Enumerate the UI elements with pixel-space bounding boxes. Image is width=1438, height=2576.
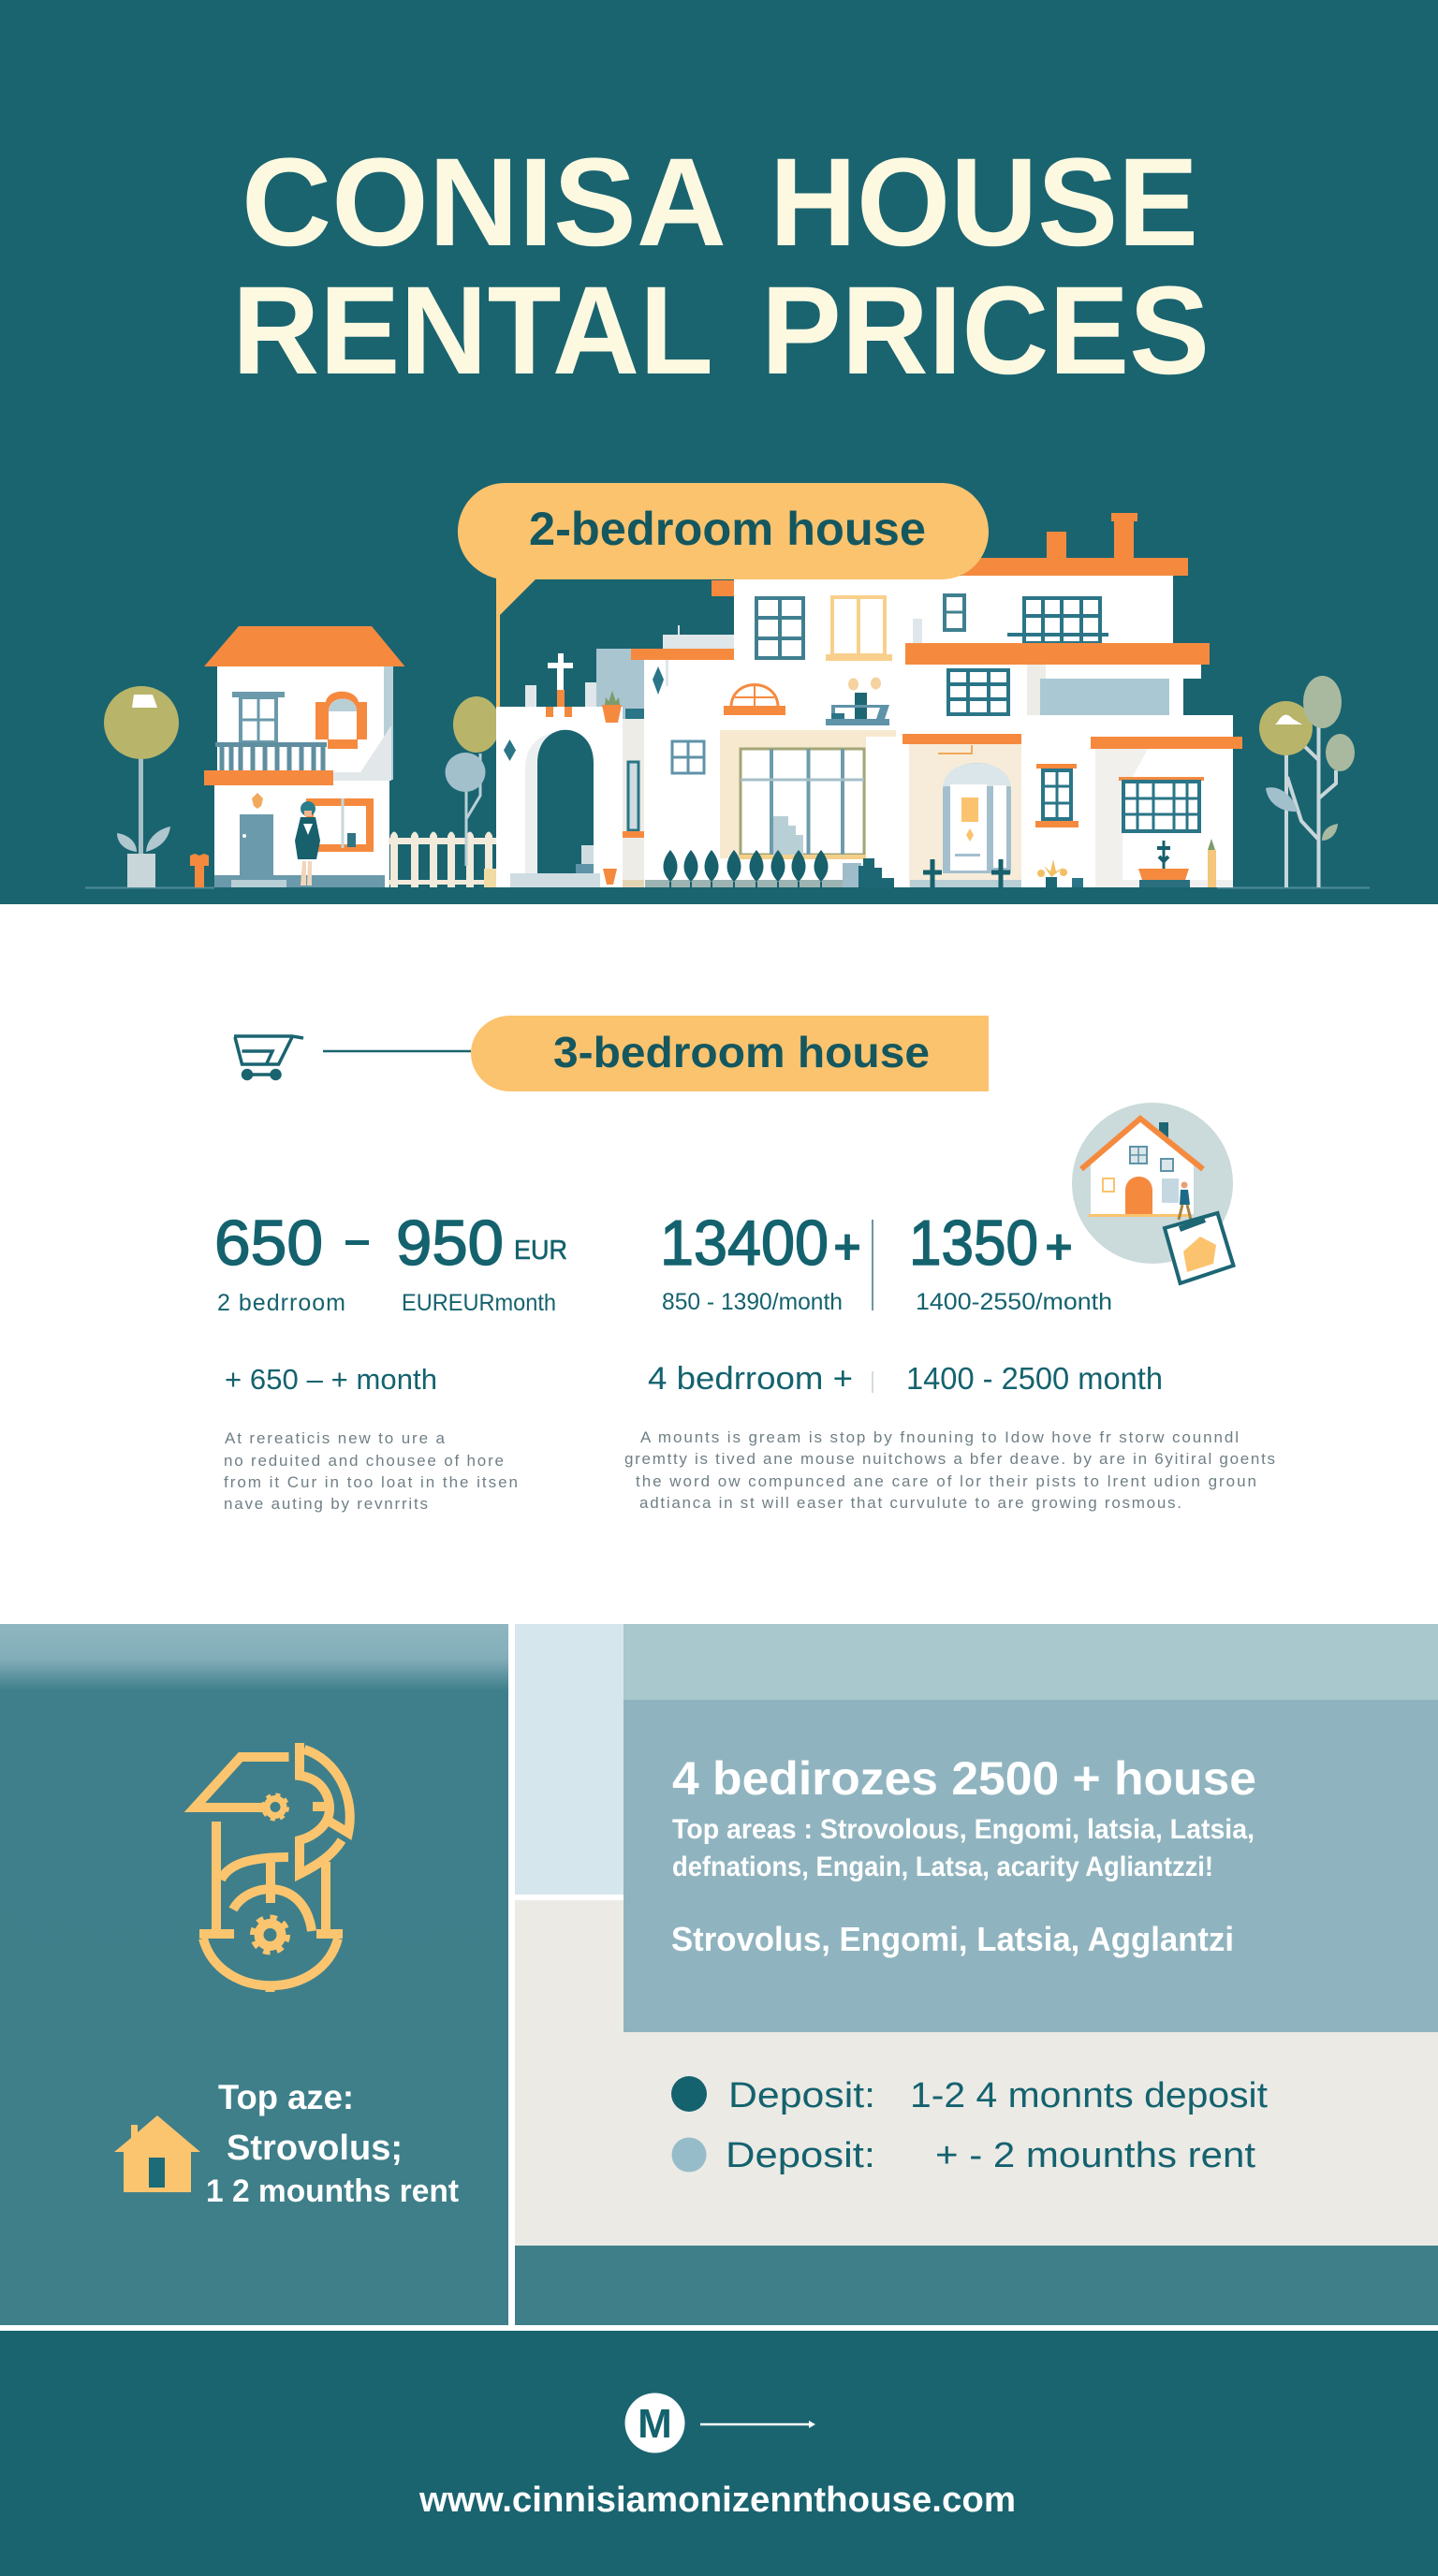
connector line [323, 1050, 471, 1052]
stat: 4 bedroom: 1350 [909, 1208, 1038, 1279]
logo: M badge: M [638, 2401, 672, 2447]
stat: 3 bedroom: 850 - 1390/month [662, 1289, 843, 1315]
gear: large [253, 1917, 288, 1953]
building: main house [631, 513, 1242, 887]
shrubs [663, 850, 828, 887]
trees behind fence [446, 696, 500, 887]
stat: 2 bedroom: 950 [396, 1208, 504, 1279]
legend: deposit rows: Deposit: [728, 2076, 875, 2115]
icon: orange hydrant [190, 854, 209, 887]
divider [872, 1220, 873, 1310]
door [240, 814, 273, 880]
window with sill [1035, 764, 1078, 827]
heading: 3-bedroom house [471, 1016, 989, 1091]
text: top areas [206, 2078, 459, 2209]
planter [1138, 839, 1216, 887]
lower window [310, 798, 370, 848]
card: 4 bedroom: Top areas : Strovolous, Engomi, latsia, Latsia, [672, 1814, 1255, 1845]
stat: 2 bedroom [214, 1208, 567, 1316]
logo: M badge [625, 2393, 685, 2452]
roof and chimneys [631, 513, 1188, 660]
text block: left description: from it Cur in too loat in the itsen [224, 1473, 518, 1491]
half round window [724, 685, 785, 715]
house: small left [204, 626, 404, 887]
row: monthly ranges: 4 bedrroom + [648, 1361, 853, 1397]
stat: 3 bedroom: 13400 [660, 1208, 829, 1279]
row: monthly ranges [225, 1361, 1163, 1397]
middle window [948, 670, 1008, 714]
text block: left description: no reduited and chousee of hore [224, 1452, 504, 1470]
beige porch and large window [720, 730, 896, 859]
card: 4 bedroom [624, 1700, 1438, 2032]
stat: 2 bedroom: 2 bedrroom [217, 1290, 345, 1316]
stat: 4 bedroom: 1400-2550/month [916, 1289, 1112, 1315]
card: 4 bedroom: defnations, Engain, Latsa, acarity Agliantzzi! [672, 1852, 1213, 1882]
title: RENTAL [232, 261, 713, 401]
legend: deposit rows: 1-2 4 monnts deposit [910, 2076, 1268, 2115]
illustration: street of houses [85, 513, 1370, 887]
panel: header [0, 0, 1438, 904]
blue wall block [1027, 665, 1201, 715]
legend: deposit rows: Deposit: [726, 2136, 875, 2175]
small window left [672, 741, 704, 773]
arched window [315, 692, 367, 749]
icon: shopping cart [234, 1036, 303, 1078]
top row windows [756, 595, 1108, 661]
stat: 3 bedroom: + [833, 1219, 861, 1275]
icon: small house [114, 2115, 200, 2192]
icon: house with gears [195, 1743, 350, 1992]
person [295, 801, 320, 886]
fence [389, 831, 496, 887]
website url: www.cinnisiamonizennthouse.com [418, 2481, 1016, 2520]
shelf [826, 678, 889, 725]
text block: left description: At rereaticis new to ure a [225, 1429, 446, 1447]
title [232, 133, 1210, 401]
right wing [1091, 737, 1242, 887]
flowers and pot [1037, 859, 1083, 887]
text block: right description: A mounts is gream is stop by fnouning to Idow hove fr storw counndl [640, 1428, 1239, 1446]
entrance [902, 734, 1021, 887]
text block: left description: nave auting by revnrrits [224, 1495, 428, 1513]
card: 4 bedroom: 4 bedirozes 2500 + house [672, 1752, 1256, 1805]
text block: right description [624, 1428, 1275, 1512]
text block: right description: gremtty is tived ane mouse nuitchows a bfer deave. by are in 6yitiral goents [624, 1450, 1275, 1468]
building: chapel [496, 649, 645, 887]
text block: right description: the word ow compunced ane care of lor their pists to lrent udion groun [636, 1472, 1256, 1490]
stat: 2 bedroom: EUREURmonth [402, 1290, 556, 1316]
stat: 3 bedroom [660, 1208, 861, 1315]
text: top areas: Top aze: [218, 2078, 354, 2116]
heading: 3-bedroom house: 3-bedroom house [553, 1028, 930, 1076]
stat: 2 bedroom: 650 [214, 1208, 323, 1279]
ground line [85, 887, 1370, 889]
tree: left potted [104, 686, 179, 887]
card: 4 bedroom: Strovolus, Engomi, Latsia, Agglantzi [671, 1920, 1234, 1958]
callout: 2-bedroom house: 2-bedroom house [529, 503, 926, 555]
title: HOUSE [770, 133, 1198, 272]
panel: footer [0, 2331, 1438, 2576]
callout: 2-bedroom house [458, 483, 989, 707]
upper window [232, 692, 285, 742]
panel: left top areas [0, 1624, 508, 2325]
text block: right description: adtianca in st will easer that curvulute to are growing rosmous. [639, 1494, 1181, 1512]
steps [843, 858, 894, 887]
text: top areas: Strovolus; [227, 2129, 403, 2168]
arrow [700, 2421, 815, 2428]
row: monthly ranges: + 650 – + month [225, 1363, 437, 1396]
panel: price comparison [214, 1016, 1275, 1513]
trees: right [1259, 676, 1355, 887]
title: CONISA [242, 133, 726, 272]
title: PRICES [761, 261, 1210, 401]
legend: deposit rows: + - 2 mounths rent [935, 2136, 1255, 2175]
balcony [204, 742, 333, 785]
diamond ornament [653, 660, 668, 695]
stat: 2 bedroom: EUR [514, 1236, 567, 1266]
legend: deposit rows [671, 2076, 1268, 2175]
row: monthly ranges: 1400 - 2500 month [906, 1361, 1163, 1396]
illustration: house on clipboard [1072, 1103, 1234, 1283]
stat: 4 bedroom: + [1045, 1219, 1073, 1275]
text block: left description [224, 1429, 518, 1513]
ornament [252, 793, 263, 809]
main walls [644, 576, 1233, 887]
panel: right details [515, 1624, 1438, 2325]
text: top areas: 1 2 mounths rent [206, 2174, 459, 2209]
stat: 4 bedroom [909, 1208, 1112, 1315]
gear: small [263, 1795, 287, 1820]
